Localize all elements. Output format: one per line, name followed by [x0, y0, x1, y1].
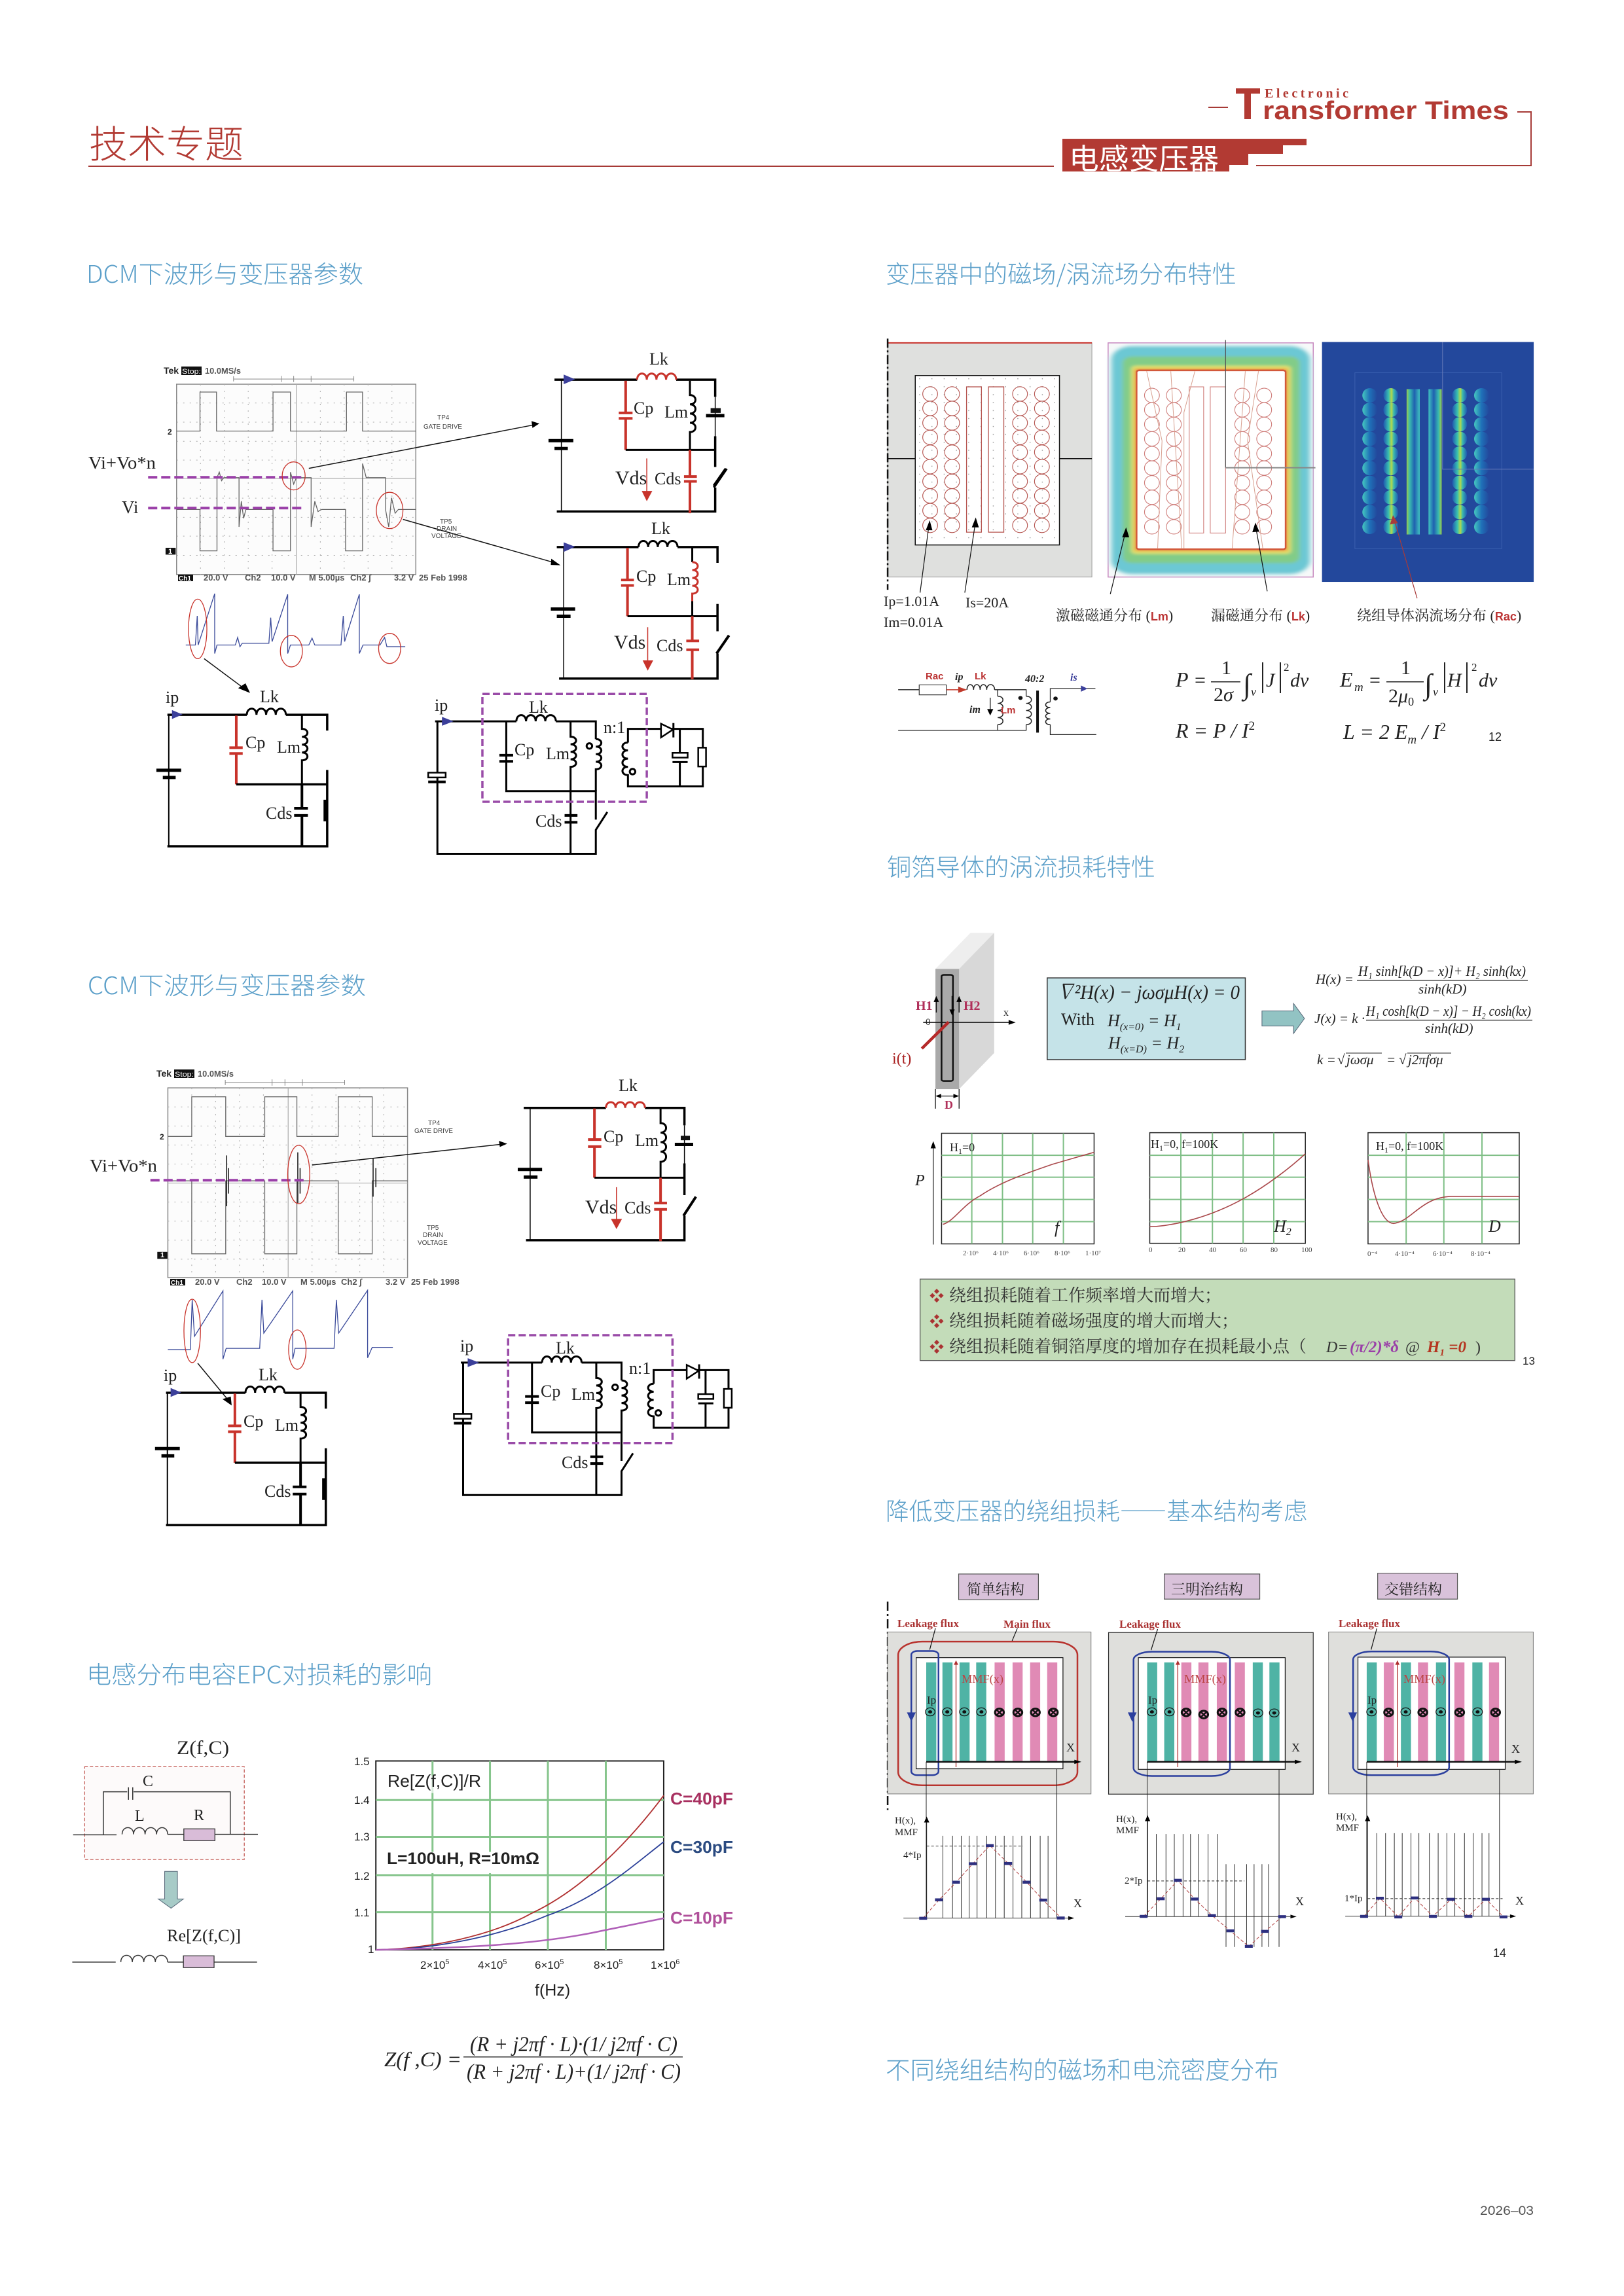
- solution formulas: sinh(kD): [1418, 981, 1466, 997]
- panel: CCM waveforms and circuits: [90, 1068, 732, 1525]
- formulas: P, R, Em, L: ∫: [1241, 668, 1253, 702]
- circuit: Cp Lk resonance: Cp: [634, 399, 653, 418]
- oscilloscope CCM: 10.0MS/s: [198, 1069, 234, 1079]
- circuit: Cp Lk resonance: [549, 350, 727, 513]
- oscilloscope DCM: 10.0MS/s: [205, 366, 241, 376]
- panel: winding structures: [888, 1573, 1533, 1960]
- chart: P vs D: 1: [1384, 1145, 1388, 1155]
- structure: simple: Main flux: [1003, 1618, 1051, 1630]
- chart: Re[Z]/R vs frequency: 1×10: [651, 1959, 676, 1971]
- structure: interleaved: 1*Ip: [1344, 1893, 1363, 1904]
- structure: interleaved: H(x),: [1336, 1812, 1357, 1822]
- circuit: lower left CCM: Cds: [264, 1482, 291, 1501]
- formulas: P, R, Em, L: R = P / I: [1176, 719, 1249, 742]
- formulas: P, R, Em, L: =: [1369, 670, 1380, 691]
- chart: Re[Z]/R vs frequency: 1.5: [354, 1755, 370, 1768]
- structure: interleaved: [1329, 1573, 1533, 1918]
- formula: Z(f,C): (R + j2πf · L)+(1/ j2πf · C): [467, 2060, 681, 2084]
- callout: winding loss conclusions: 绕组损耗随着工作频率增大而增大；: [949, 1286, 1221, 1305]
- formulas: P, R, Em, L: =: [1195, 670, 1206, 691]
- oscilloscope DCM: Ch2 ∫: [350, 573, 372, 583]
- oscilloscope CCM: DRAIN: [423, 1232, 443, 1239]
- chart: Re[Z]/R vs frequency: C=30pF: [670, 1837, 733, 1857]
- structure: sandwich: 三明治结构: [1171, 1581, 1243, 1598]
- oscilloscope CCM: 25 Feb 1998: [411, 1277, 460, 1287]
- panel: field distribution: [884, 338, 1534, 747]
- heading: field and current distribution: 不同绕组结构的磁场和电流密度分布: [886, 2051, 1279, 2086]
- structure: sandwich: MMF: [1116, 1825, 1139, 1836]
- oscilloscope CCM: [90, 1068, 507, 1287]
- page number 13: 13: [1523, 1355, 1535, 1367]
- structure: simple: [888, 1574, 1091, 1920]
- structure: sandwich: MMF(x): [1184, 1672, 1226, 1686]
- oscilloscope CCM: 1: [160, 1251, 164, 1259]
- structure: simple: Leakage flux: [897, 1617, 959, 1630]
- circuit: lower right CCM with transformer: Lk: [556, 1338, 575, 1357]
- formulas: P, R, Em, L: H: [1447, 670, 1463, 691]
- callout: winding loss conclusions: [920, 1279, 1515, 1361]
- chart: P vs f: 1·10⁷: [1085, 1249, 1101, 1257]
- formulas: P, R, Em, L: m: [1354, 681, 1363, 694]
- structure: simple: 简单结构: [967, 1581, 1024, 1598]
- structure: interleaved: MMF: [1336, 1823, 1359, 1833]
- oscilloscope DCM: 25 Feb 1998: [419, 573, 467, 583]
- callout: winding loss conclusions: H: [1427, 1338, 1439, 1356]
- formulas: P, R, Em, L: L = 2 E: [1343, 720, 1407, 744]
- chart: Re[Z]/R vs frequency: 6: [676, 1958, 679, 1966]
- structure: simple: Ip: [927, 1694, 936, 1706]
- formulas: P, R, Em, L: E: [1339, 668, 1353, 691]
- structure: sandwich: Ip: [1148, 1694, 1157, 1706]
- oscilloscope DCM: TP4: [437, 414, 450, 422]
- foil 3D diagram: 0: [926, 1017, 931, 1028]
- chart: P vs H2: [1149, 1133, 1312, 1254]
- solution formulas: √: [1337, 1052, 1345, 1067]
- callout: winding loss conclusions: 绕组损耗随着铜箔厚度的增加存在损耗最小点（: [949, 1337, 1307, 1356]
- formulas: P, R, Em, L: v: [1251, 685, 1256, 698]
- formulas: P, R, Em, L: v: [1433, 685, 1438, 698]
- formulas: P, R, Em, L: P: [1175, 668, 1189, 691]
- circuit: Cp Lk resonance: Lk: [649, 350, 668, 368]
- circuit: winding equivalent: 40:2: [1024, 673, 1044, 685]
- chart: P vs H2: H: [1274, 1217, 1286, 1236]
- formulas: P, R, Em, L: 2: [1249, 719, 1255, 733]
- magazine logo: Electronic: [1265, 86, 1348, 101]
- circuit: lower right CCM with transformer: [454, 1335, 732, 1495]
- chart: P vs f: 8·10⁶: [1055, 1249, 1070, 1257]
- model geometry: Is=20A: [965, 594, 1009, 611]
- circuit: winding equivalent: Rac: [926, 671, 944, 682]
- structure: sandwich: X: [1295, 1895, 1304, 1908]
- circuit: CCM Cp Cds: Cds: [624, 1198, 651, 1217]
- model geometry: [884, 338, 1092, 630]
- oscilloscope DCM: DRAIN: [437, 526, 457, 533]
- oscilloscope DCM: 1: [168, 548, 172, 556]
- callout: winding loss conclusions: ): [1475, 1339, 1481, 1356]
- circuit: lower right DCM with transformer: Lk: [529, 698, 548, 717]
- magazine logo: ransformer Times: [1263, 97, 1509, 125]
- formulas: P, R, Em, L: 2: [1284, 661, 1290, 673]
- panel: EPC equivalent circuit: R: [194, 1807, 204, 1824]
- title: 技术专题: 技术专题: [89, 124, 244, 166]
- circuit: lower left DCM: Cds: [266, 804, 292, 823]
- category tab: [1062, 139, 1307, 175]
- formula: Z(f,C): [384, 2033, 683, 2084]
- chart: P vs f: 4·10⁶: [993, 1249, 1009, 1257]
- header: [88, 86, 1531, 175]
- chart: Re[Z]/R vs frequency: 6×10: [535, 1959, 560, 1971]
- chart: P vs D: H: [1376, 1139, 1384, 1153]
- circuit: lower right DCM with transformer: Cp: [514, 740, 534, 759]
- callout: winding loss conclusions: @: [1405, 1339, 1420, 1356]
- oscilloscope CCM: Tek: [156, 1068, 171, 1079]
- heading: CCM: CCM下波形与变压器参数: [88, 966, 366, 1001]
- oscilloscope DCM: 2: [168, 427, 172, 437]
- equation box: [1047, 978, 1245, 1060]
- solution formulas: jωσμ: [1344, 1052, 1374, 1067]
- chart: P vs H2: 1: [1159, 1143, 1163, 1153]
- circuit: CCM Cp Cds: Vds: [585, 1196, 617, 1218]
- panel: EPC equivalent circuit: Re[Z(f,C)]: [167, 1926, 241, 1945]
- heading: copper foil: 铜箔导体的涡流损耗特性: [887, 848, 1155, 883]
- formulas: P, R, Em, L: 2: [1440, 721, 1446, 734]
- circuit: lower right DCM with transformer: ip: [435, 696, 448, 715]
- chart: P vs H2: 20: [1178, 1246, 1186, 1254]
- oscilloscope DCM: Vi+Vo*n: [88, 453, 156, 473]
- equation box: = H: [1147, 1033, 1180, 1052]
- chart: P vs D: 8·10⁻⁴: [1471, 1250, 1490, 1258]
- foil 3D diagram: i(t): [892, 1050, 911, 1067]
- circuit: lower left CCM: ip: [164, 1366, 177, 1385]
- eddy current map: [1322, 342, 1534, 624]
- circuit: Cp Lk resonance: Vds: [615, 467, 647, 489]
- circuit: lower left DCM: Lk: [260, 687, 279, 706]
- circuit: lower left CCM: [155, 1365, 326, 1525]
- circuit: CCM Cp Cds: Lk: [619, 1076, 638, 1095]
- circuit: lower left CCM: Lk: [259, 1365, 278, 1384]
- current waveform: [186, 594, 405, 693]
- chart: Re[Z]/R vs frequency: L=100uH, R=10mΩ: [387, 1850, 539, 1868]
- foil 3D diagram: H2: [964, 999, 981, 1013]
- chart: P vs f: H: [950, 1141, 958, 1154]
- chart: P vs D: 4·10⁻⁴: [1395, 1250, 1415, 1258]
- oscilloscope DCM: Tek: [164, 365, 179, 376]
- equation box: = H: [1144, 1011, 1177, 1030]
- eddy current map: 绕组导体涡流场分布 (Rac): [1357, 607, 1521, 624]
- panel: copper foil eddy current: [892, 933, 1535, 1367]
- circuit: winding equivalent: [898, 671, 1096, 734]
- chart: Re[Z]/R vs frequency: 2×10: [420, 1959, 445, 1971]
- equation box: With: [1061, 1010, 1094, 1029]
- solution formulas: √: [1399, 1052, 1407, 1067]
- solution formulas: sinh(kD): [1425, 1020, 1473, 1036]
- structure: simple: H(x),: [895, 1816, 916, 1826]
- oscilloscope DCM: Ch1: [179, 575, 191, 583]
- footer date: 2026–03: [1480, 2204, 1534, 2218]
- chart: P vs H2: 60: [1240, 1246, 1248, 1254]
- model geometry: Im=0.01A: [884, 614, 943, 630]
- chart: Re[Z]/R vs frequency: 1.2: [354, 1870, 370, 1882]
- circuit: lower right DCM with transformer: Lm: [546, 744, 569, 763]
- chart: Re[Z]/R vs frequency: 8×10: [594, 1959, 619, 1971]
- heading: EPC: 电感分布电容EPC对损耗的影响: [86, 1655, 432, 1691]
- page number 14: 14: [1493, 1946, 1506, 1960]
- panel: EPC equivalent circuit: L: [135, 1808, 145, 1825]
- chart: P vs f: P: [914, 1172, 925, 1189]
- formula: Z(f,C): Z(f ,C) =: [384, 2047, 461, 2071]
- equation box: ∇²H(x) − jωσμH(x) = 0: [1056, 980, 1240, 1003]
- structure: simple: 4*Ip: [903, 1850, 922, 1861]
- callout: winding loss conclusions: 1: [1439, 1348, 1445, 1358]
- callout: winding loss conclusions: (π/2)*δ: [1350, 1338, 1399, 1356]
- circuit: CCM Cp Cds: [518, 1076, 696, 1241]
- circuit: Lm Cds resonance: Cp: [636, 567, 656, 586]
- heading: basic structure: 降低变压器的绕组损耗——基本结构考虑: [886, 1492, 1307, 1527]
- chart: Re[Z]/R vs frequency: 1.4: [354, 1794, 370, 1806]
- oscilloscope DCM: Vi: [122, 497, 138, 517]
- circuit: winding equivalent: im: [969, 704, 981, 715]
- solution formulas: H₁ sinh[k(D − x)]+ H₂ sinh(kx): [1358, 963, 1526, 979]
- circuit: lower left DCM: Cp: [245, 733, 265, 752]
- magnetic flux map: 漏磁通分布 (Lk): [1211, 607, 1310, 624]
- chart: P vs D: 6·10⁻⁴: [1433, 1250, 1453, 1258]
- oscilloscope CCM: Vi+Vo*n: [90, 1156, 158, 1175]
- callout: winding loss conclusions: ❖: [929, 1339, 944, 1355]
- solution formulas: H(x) =: [1315, 971, 1354, 987]
- foil 3D diagram: x: [1003, 1007, 1009, 1018]
- structure: interleaved: Leakage flux: [1339, 1617, 1400, 1630]
- structure: simple: X: [1066, 1741, 1075, 1754]
- solution formulas: j2πfσμ: [1406, 1052, 1443, 1067]
- formulas: P, R, Em, L: 0: [1408, 695, 1414, 708]
- circuit: lower right DCM with transformer: Cds: [535, 812, 562, 831]
- foil 3D diagram: H1: [916, 999, 933, 1013]
- chart: Re[Z]/R vs frequency: 5: [619, 1958, 623, 1966]
- oscilloscope DCM: M 5.00µs: [309, 573, 344, 583]
- circuit: Lm Cds resonance: Lk: [651, 519, 670, 538]
- circuit: Lm Cds resonance: Vds: [614, 632, 645, 653]
- oscilloscope CCM: 20.0 V: [195, 1277, 220, 1287]
- heading: DCM: DCM下波形与变压器参数: [86, 255, 363, 290]
- oscilloscope DCM: [88, 365, 560, 583]
- panel: EPC equivalent circuit: C: [143, 1773, 153, 1790]
- chart: Re[Z]/R vs frequency: 4×10: [478, 1959, 503, 1971]
- magnetic flux map: 激磁磁通分布 (Lm): [1056, 607, 1173, 624]
- oscilloscope CCM: Ch2 ∫: [341, 1277, 363, 1287]
- oscilloscope DCM: 20.0 V: [204, 573, 228, 583]
- chart: Re[Z]/R vs frequency: 5: [445, 1958, 449, 1966]
- chart: P vs H2: 100: [1301, 1246, 1312, 1254]
- formulas: P, R, Em, L: 1: [1401, 657, 1411, 679]
- chart: Re[Z]/R vs frequency: 5: [560, 1958, 564, 1966]
- oscilloscope DCM: Ch2: [245, 573, 261, 583]
- formulas: P, R, Em, L: 2: [1471, 661, 1477, 673]
- structure: sandwich: H(x),: [1116, 1814, 1137, 1825]
- formulas: P, R, Em, L: ∫: [1422, 668, 1434, 702]
- chart: Re[Z]/R vs frequency: 5: [503, 1958, 507, 1966]
- circuit: lower right CCM with transformer: Lm: [571, 1385, 595, 1404]
- circuit: lower left CCM: Cp: [244, 1412, 263, 1431]
- circuit: CCM Cp Cds: Cp: [604, 1127, 623, 1146]
- circuit: lower left DCM: Lm: [277, 738, 300, 757]
- callout: winding loss conclusions: 绕组损耗随着磁场强度的增大而增大；: [949, 1312, 1238, 1331]
- magazine logo: [1236, 86, 1509, 125]
- structure: sandwich: X: [1291, 1741, 1300, 1754]
- chart: P vs f: [914, 1134, 1101, 1257]
- panel: EPC equivalent circuit: Z(f,C): [177, 1737, 229, 1759]
- chart: Re[Z]/R vs frequency: [354, 1755, 733, 2000]
- oscilloscope DCM: 3.2 V: [394, 573, 414, 583]
- formulas: P, R, Em, L: 2σ: [1214, 684, 1234, 706]
- chart: P vs H2: 0: [1149, 1246, 1153, 1254]
- formulas: P, R, Em, L: J: [1266, 670, 1276, 691]
- chart: Re[Z]/R vs frequency: C=10pF: [670, 1908, 733, 1928]
- oscilloscope DCM: TP5: [440, 518, 452, 526]
- solution formulas: =: [1386, 1052, 1396, 1067]
- oscilloscope CCM: 2: [160, 1132, 164, 1141]
- oscilloscope DCM: 10.0 V: [271, 573, 296, 583]
- chart: P vs H2: =0, f=100K: [1163, 1138, 1218, 1151]
- chart: Re[Z]/R vs frequency: Re[Z(f,C)]/R: [388, 1771, 481, 1791]
- structure: simple: X: [1074, 1897, 1082, 1910]
- chart: P vs f: 6·10⁶: [1024, 1249, 1039, 1257]
- circuit: winding equivalent: Lk: [975, 671, 986, 682]
- circuit: lower right DCM with transformer: [428, 694, 706, 853]
- oscilloscope CCM: GATE DRIVE: [414, 1128, 453, 1135]
- equation box: H: [1108, 1011, 1120, 1030]
- chart: P vs H2: 2: [1286, 1227, 1291, 1238]
- current waveform CCM: [168, 1290, 393, 1405]
- formulas: P, R, Em, L: / I: [1416, 720, 1441, 744]
- circuit: winding equivalent: is: [1070, 672, 1077, 683]
- callout: winding loss conclusions: =0: [1445, 1338, 1466, 1356]
- equation box: (x=D): [1121, 1044, 1147, 1055]
- chart: P vs f: 1: [958, 1147, 962, 1156]
- circuit: lower left DCM: ip: [166, 688, 179, 707]
- solution formulas: [1314, 963, 1532, 1067]
- oscilloscope CCM: M 5.00µs: [300, 1277, 336, 1287]
- structure: interleaved: MMF(x): [1403, 1672, 1445, 1686]
- circuit: Lm Cds resonance: Lm: [667, 570, 691, 589]
- panel: DCM waveforms and circuits: [88, 350, 729, 853]
- chart: Re[Z]/R vs frequency: 1.3: [354, 1831, 370, 1843]
- circuit: winding equivalent: Lm: [1001, 705, 1016, 716]
- chart: P vs f: f: [1055, 1218, 1062, 1237]
- chart: Re[Z]/R vs frequency: C=40pF: [670, 1789, 733, 1808]
- formulas: P, R, Em, L: [1175, 657, 1502, 747]
- formulas: P, R, Em, L: m: [1407, 733, 1416, 747]
- circuit: lower left CCM: Lm: [275, 1416, 298, 1435]
- circuit: lower right DCM with transformer: n:1: [604, 718, 625, 737]
- callout: winding loss conclusions: D=: [1326, 1339, 1348, 1356]
- callout: winding loss conclusions: ❖: [929, 1314, 944, 1330]
- solution formulas: J(x) = k ·: [1314, 1011, 1365, 1026]
- structure: simple: MMF(x): [962, 1672, 1003, 1686]
- chart: P vs f: =0: [962, 1141, 975, 1154]
- chart: P vs H2: 80: [1271, 1246, 1278, 1254]
- equation box: (x=0): [1120, 1022, 1144, 1033]
- arrow: [1262, 1003, 1305, 1033]
- circuit: lower right CCM with transformer: Cds: [562, 1453, 588, 1472]
- foil 3D diagram: [892, 933, 1016, 1111]
- formulas: P, R, Em, L: dv: [1290, 670, 1309, 691]
- circuit: lower right CCM with transformer: ip: [460, 1336, 473, 1355]
- structure: sandwich: 2*Ip: [1125, 1876, 1143, 1886]
- structure: interleaved: 交错结构: [1384, 1581, 1442, 1598]
- oscilloscope CCM: 10.0 V: [262, 1277, 287, 1287]
- oscilloscope CCM: Stop:: [175, 1071, 194, 1079]
- oscilloscope CCM: Ch1: [171, 1280, 183, 1287]
- oscilloscope CCM: Ch2: [236, 1277, 253, 1287]
- circuit: winding equivalent: ip: [955, 672, 963, 683]
- structure: sandwich: Leakage flux: [1119, 1618, 1181, 1630]
- chart: P vs D: 0⁻⁴: [1367, 1250, 1377, 1258]
- oscilloscope DCM: VOLTAGE: [431, 533, 461, 540]
- circuit: Cp Lk resonance: Cds: [655, 469, 681, 488]
- circuit: Lm Cds resonance: [550, 519, 729, 679]
- chart: P vs H2: 40: [1209, 1246, 1216, 1254]
- structure: simple: MMF: [895, 1827, 918, 1838]
- formulas: P, R, Em, L: 1: [1221, 657, 1231, 679]
- solution formulas: H₁ cosh[k(D − x)] − H₂ cosh(kx): [1365, 1003, 1531, 1019]
- circuit: lower left DCM: [156, 687, 327, 846]
- solution formulas: k =: [1317, 1052, 1336, 1067]
- formulas: P, R, Em, L: dv: [1479, 670, 1498, 691]
- chart: Re[Z]/R vs frequency: f(Hz): [535, 1981, 570, 2000]
- circuit: lower right CCM with transformer: Cp: [541, 1382, 560, 1401]
- chart: Re[Z]/R vs frequency: 1: [368, 1943, 374, 1956]
- equation box: H: [1108, 1033, 1121, 1052]
- chart: P vs f: 2·10⁶: [963, 1249, 979, 1257]
- equation box: 1: [1176, 1022, 1182, 1033]
- chart: P vs D: =0, f=100K: [1388, 1139, 1443, 1153]
- panel: EPC equivalent circuit: [72, 1737, 258, 1967]
- chart: P vs D: D: [1488, 1217, 1501, 1236]
- formulas: P, R, Em, L: 2μ: [1388, 685, 1408, 707]
- category tab: 电感变压器: [1069, 143, 1219, 175]
- oscilloscope CCM: 3.2 V: [386, 1277, 406, 1287]
- circuit: CCM Cp Cds: Lm: [635, 1131, 659, 1150]
- oscilloscope DCM: Stop:: [182, 368, 201, 376]
- oscilloscope CCM: TP5: [427, 1225, 439, 1232]
- structure: interleaved: X: [1511, 1742, 1520, 1755]
- structure: interleaved: Ip: [1367, 1694, 1377, 1706]
- chart: Re[Z]/R vs frequency: 1.1: [354, 1907, 370, 1919]
- callout: winding loss conclusions: ❖: [929, 1288, 944, 1304]
- oscilloscope DCM: GATE DRIVE: [424, 423, 462, 431]
- structure: sandwich: [1109, 1574, 1313, 1948]
- magnetic flux map: [1056, 340, 1316, 624]
- chart: P vs D: [1367, 1133, 1519, 1258]
- circuit: Cp Lk resonance: Lm: [664, 403, 688, 422]
- equation box: 2: [1179, 1044, 1184, 1055]
- foil 3D diagram: D: [945, 1098, 953, 1111]
- formulas: P, R, Em, L: 12: [1489, 730, 1502, 744]
- circuit: Lm Cds resonance: Cds: [657, 636, 683, 655]
- chart: P vs H2: H: [1151, 1138, 1159, 1151]
- structure: interleaved: X: [1515, 1894, 1524, 1907]
- formula: Z(f,C): (R + j2πf · L)·(1/ j2πf · C): [470, 2033, 677, 2056]
- heading: field distribution: 变压器中的磁场/涡流场分布特性: [886, 255, 1236, 290]
- oscilloscope CCM: VOLTAGE: [418, 1240, 448, 1247]
- oscilloscope CCM: TP4: [428, 1120, 441, 1127]
- circuit: lower right CCM with transformer: n:1: [629, 1359, 651, 1378]
- model geometry: Ip=1.01A: [884, 593, 939, 609]
